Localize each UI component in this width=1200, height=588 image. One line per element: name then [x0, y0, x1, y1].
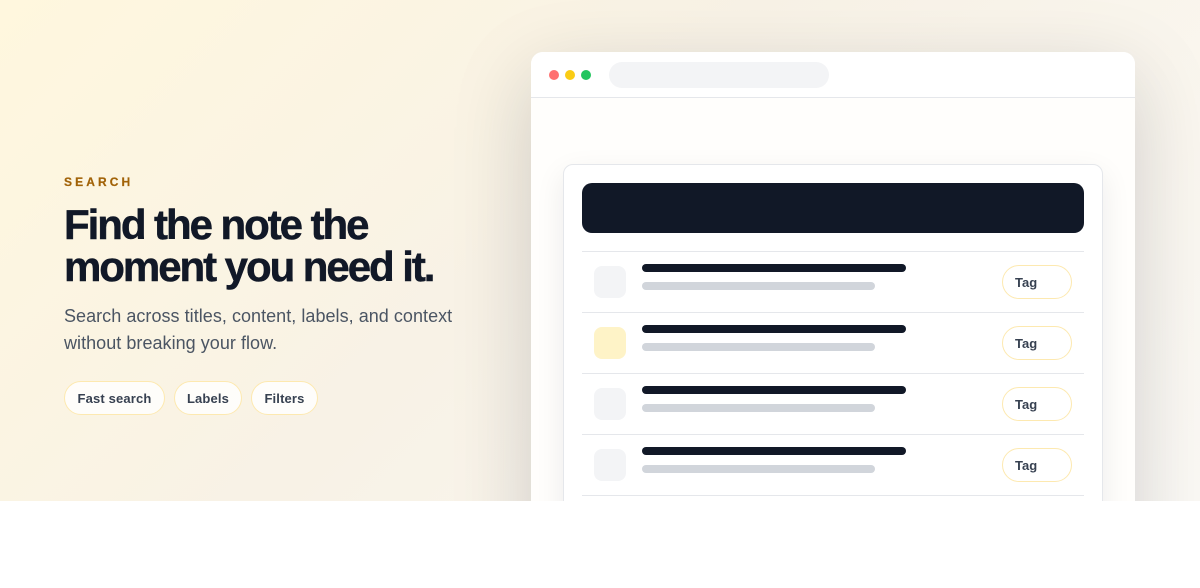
tag — [1002, 265, 1072, 299]
browser toolbar — [531, 52, 1135, 98]
chip: labels — [174, 381, 242, 415]
row icon — [594, 388, 626, 420]
result row 1 — [582, 251, 1084, 312]
subtitle line — [642, 343, 875, 351]
tag: Tag — [1015, 458, 1037, 473]
result row 2 — [582, 312, 1084, 373]
subtitle line — [642, 404, 875, 412]
eyebrow label: SEARCH — [64, 175, 133, 189]
subtitle line — [642, 282, 875, 290]
chip: filters: Filters — [264, 391, 305, 406]
result row 5 divider — [582, 495, 1084, 556]
result row 3 — [582, 373, 1084, 434]
heading: Find the note the — [64, 201, 367, 248]
row icon highlighted — [594, 327, 626, 359]
title line — [642, 447, 906, 455]
window dot: yellow — [565, 70, 575, 80]
row icon — [594, 266, 626, 298]
address bar — [609, 62, 829, 88]
heading — [64, 201, 433, 290]
tag: Tag — [1015, 336, 1037, 351]
tag — [1002, 326, 1072, 360]
description text: Search across titles, content, labels, and context — [64, 306, 452, 326]
tag: Tag — [1015, 275, 1037, 290]
browser window — [531, 52, 1135, 572]
description text: without breaking your flow. — [64, 333, 277, 353]
chip: filters — [251, 381, 318, 415]
description text — [64, 306, 452, 353]
tag — [1002, 387, 1072, 421]
search bar — [582, 183, 1084, 233]
tag — [1002, 448, 1072, 482]
results card — [563, 164, 1103, 584]
title line — [642, 386, 906, 394]
tag: Tag — [1015, 397, 1037, 412]
title line — [642, 264, 906, 272]
result row 4 — [582, 434, 1084, 495]
heading: moment you need it. — [64, 243, 433, 290]
row icon — [594, 449, 626, 481]
window dot: green — [581, 70, 591, 80]
window dot: red — [549, 70, 559, 80]
subtitle line — [642, 465, 875, 473]
title line — [642, 325, 906, 333]
chip: fast search — [64, 381, 165, 415]
chip: fast search: Fast search — [78, 391, 151, 406]
chip: labels: Labels — [187, 391, 229, 406]
